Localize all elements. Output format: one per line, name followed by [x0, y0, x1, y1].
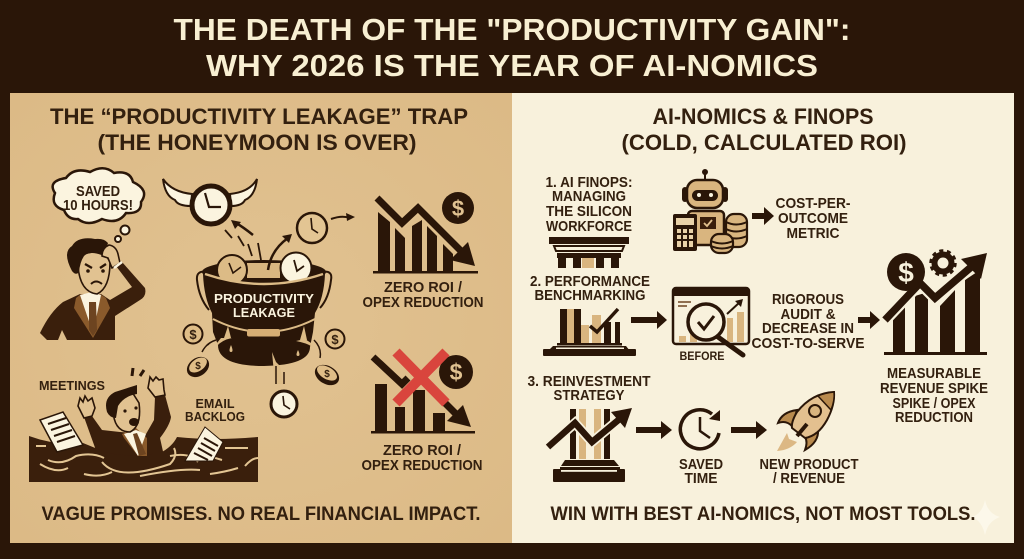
text: new product — [760, 456, 858, 487]
label: zero roi top: OPEX REDUCTION — [362, 294, 484, 311]
text: cost-per-outcome metric: OUTCOME — [778, 210, 848, 227]
heading: leakage trap: (THE HONEYMOON IS OVER) — [98, 130, 417, 155]
icons: falling coins — [183, 324, 344, 389]
icon: bucket labeled productivity leakage — [197, 234, 331, 384]
chart: crossed-out roi bars: $ — [450, 359, 463, 385]
label: meetings: MEETINGS — [39, 378, 105, 393]
heading: leakage trap — [50, 104, 468, 155]
icon: small clock with arrow — [297, 213, 355, 243]
title — [174, 12, 850, 83]
label: email backlog: BACKLOG — [185, 409, 245, 424]
text: step 1: THE SILICON — [546, 203, 632, 220]
label: email backlog: EMAIL — [196, 396, 235, 411]
icon: rocket — [777, 392, 834, 451]
icon: pillar with rising arrow — [548, 408, 632, 482]
arrows: time escaping from bucket — [225, 220, 261, 260]
text: measurable revenue spike: REVENUE SPIKE — [880, 380, 988, 397]
title: THE DEATH OF THE "PRODUCTIVITY GAIN": — [174, 12, 850, 47]
title: WHY 2026 IS THE YEAR OF AI-NOMICS — [206, 48, 818, 83]
label: zero roi bottom: OPEX REDUCTION — [362, 457, 482, 474]
icon: revenue chart — [884, 251, 987, 355]
text: new product: / REVENUE — [773, 470, 845, 487]
arrow: to audit browser — [631, 311, 667, 329]
label: zero roi top — [362, 279, 484, 311]
text: step 1: MANAGING — [552, 188, 626, 205]
icon: pillar capital — [549, 237, 629, 268]
arrow: to revenue spike — [858, 311, 880, 329]
arrow: to saved time — [636, 421, 672, 439]
icon: meeting document — [40, 412, 83, 452]
icon: email document — [185, 427, 223, 461]
heading: ai-nomics — [622, 104, 906, 155]
footer: vague promises: VAGUE PROMISES. NO REAL FINANCIAL IMPACT. — [42, 503, 480, 525]
icon: saved time clock — [680, 410, 720, 449]
text: rigorous audit: AUDIT & — [780, 306, 836, 323]
thought bubble: saved 10 hours: 10 HOURS! — [63, 197, 133, 214]
icon: stressed businessman — [40, 238, 145, 340]
text: rigorous audit — [752, 291, 864, 352]
icon: pillar with check chart — [543, 309, 636, 356]
text: cost-per-outcome metric: COST-PER- — [776, 195, 850, 212]
label: zero roi top: ZERO ROI / — [384, 279, 463, 296]
icons: falling coins: $ — [324, 369, 330, 380]
text: step 3: 3. REINVESTMENT — [528, 373, 650, 390]
icons: falling coins: $ — [189, 327, 197, 342]
icon: drowning businessman in water — [29, 368, 258, 482]
text: step 3: STRATEGY — [554, 387, 624, 404]
text: cost-per-outcome metric — [776, 195, 850, 242]
heading: ai-nomics: AI-NOMICS & FINOPS — [652, 104, 874, 129]
chart: declining roi bars: $ — [452, 196, 464, 221]
text: measurable revenue spike: REDUCTION — [895, 409, 973, 426]
text: measurable revenue spike: MEASURABLE — [887, 365, 981, 382]
icon: bucket labeled productivity leakage: LEAKAGE — [233, 305, 295, 320]
panel: productivity leakage trap — [10, 93, 512, 543]
text: rigorous audit: DECREASE IN — [762, 320, 854, 337]
text: rigorous audit: COST-TO-SERVE — [752, 335, 864, 352]
chart: declining roi bars — [373, 192, 478, 274]
icon: revenue chart: $ — [898, 257, 914, 288]
arrow: to cost-per-outcome — [752, 207, 774, 225]
panel: ai-nomics and finops — [512, 93, 1014, 543]
label: zero roi bottom: ZERO ROI / — [383, 442, 462, 459]
heading: leakage trap: THE “PRODUCTIVITY LEAKAGE” TRAP — [50, 104, 468, 129]
text: new product: NEW PRODUCT — [760, 456, 858, 473]
text: step 2: BENCHMARKING — [534, 287, 646, 304]
text: step 2 — [530, 273, 650, 304]
text: step 1 — [546, 174, 632, 235]
label: email backlog — [185, 396, 245, 424]
text: saved time: TIME — [684, 470, 718, 487]
chart: crossed-out roi bars — [371, 352, 475, 434]
icon: falling clock — [271, 391, 297, 417]
icon: bucket labeled productivity leakage: PRODUCTIVITY — [214, 291, 314, 306]
thought bubble: saved 10 hours — [53, 168, 144, 242]
text: rigorous audit: RIGOROUS — [772, 291, 844, 308]
icon: robot with calculator and coins — [673, 169, 747, 253]
footer: win with ai-nomics: WIN WITH BEST AI-NOMICS, NOT MOST TOOLS. — [550, 503, 976, 525]
text: step 3 — [528, 373, 650, 404]
text: measurable revenue spike: SPIKE / OPEX — [892, 395, 976, 412]
text: saved time — [679, 456, 723, 487]
text: step 2: 2. PERFORMANCE — [530, 273, 650, 290]
icons: falling coins: $ — [195, 361, 201, 372]
icons: falling coins: $ — [331, 332, 339, 347]
icon: browser with magnifier — [673, 288, 749, 363]
arrow: to new product — [731, 421, 767, 439]
text: cost-per-outcome metric: METRIC — [786, 225, 840, 242]
text: step 1: WORKFORCE — [546, 218, 632, 235]
text: saved time: SAVED — [679, 456, 723, 473]
text: measurable revenue spike — [880, 365, 988, 426]
icon: sparkle — [972, 500, 1000, 535]
icon: winged flying clock — [163, 179, 257, 224]
text: step 1: 1. AI FINOPS: — [546, 174, 632, 191]
icon: browser with magnifier: BEFORE — [680, 349, 724, 363]
heading: ai-nomics: (COLD, CALCULATED ROI) — [622, 130, 906, 155]
label: zero roi bottom — [362, 442, 482, 474]
thought bubble: saved 10 hours: SAVED — [76, 183, 120, 200]
